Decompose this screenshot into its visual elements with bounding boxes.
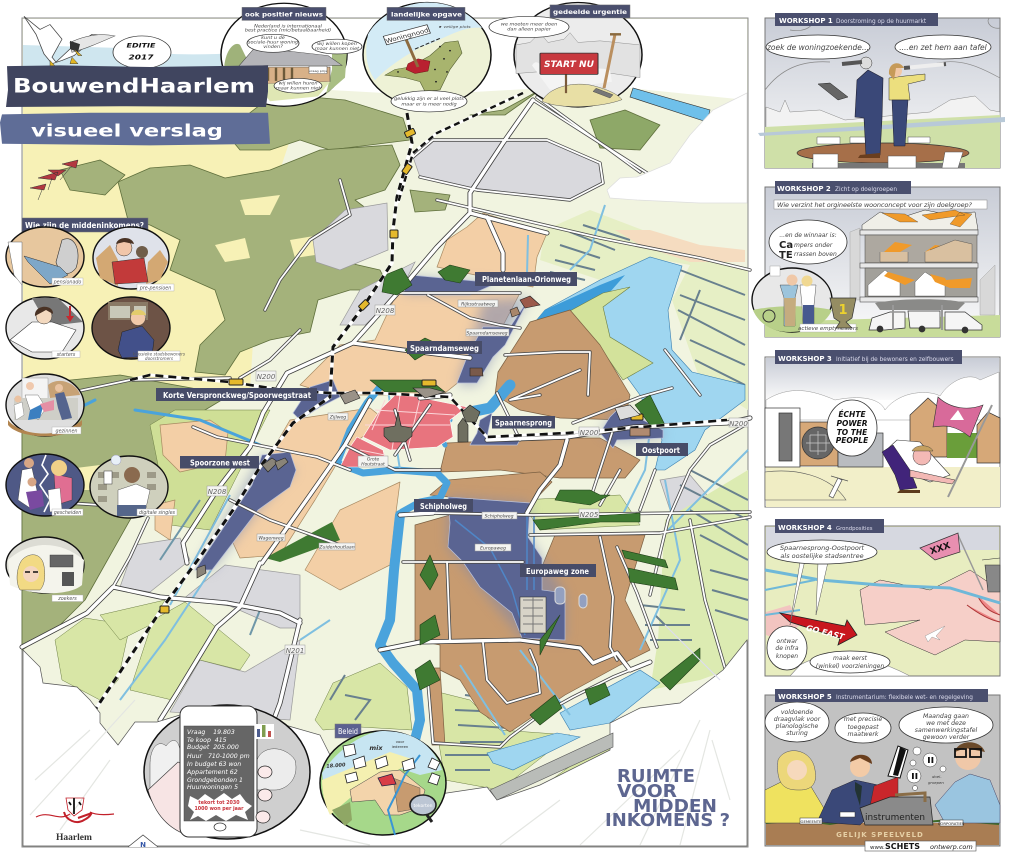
panel: workshop 5: GELIJK SPEELVELD: [836, 831, 924, 839]
speech bubbles: [247, 34, 362, 93]
speech bubble: voldoende draagvlak: [765, 702, 829, 742]
mini bar chart: [256, 724, 274, 739]
logo: schetsontwerp: SCHETS: [885, 842, 920, 851]
road name tags: N201: [286, 647, 304, 655]
dunes yellow: [23, 68, 300, 390]
historic centre red: [340, 393, 467, 467]
circle: Beleid map: tekorten: [414, 803, 433, 809]
speech bubble: zoek de woningzoekende: [766, 35, 870, 59]
speech bubble: ontwar de infra knopen: de infra: [775, 645, 799, 652]
figure: man suit: [817, 755, 880, 825]
road name tags: N200: [257, 373, 276, 381]
speech bubble: echte power: ÉCHTE: [838, 410, 866, 419]
circle: ook positief nieuws: best practice (mic/betaalbaarheid): [245, 28, 331, 33]
speech bubble: maak eerst voorzieningen: [810, 651, 890, 673]
speech bubble: zoek de woningzoekende: zoek de woningzoekende...: [766, 43, 869, 52]
label: Planetenlaan-Orionweg: [475, 272, 577, 286]
circle: pensionado: pensionado: [53, 280, 81, 286]
tab: workshop 2: WORKSHOP 2: [777, 185, 831, 193]
zone: Spaarnesprong: [470, 413, 520, 445]
speech bubbles: wij willen huren: [278, 81, 318, 86]
title: BouwendHaarlem: BouwendHaarlem: [13, 75, 255, 98]
label: Spaarndamseweg: Spaarndamseweg: [410, 344, 479, 353]
tower: [982, 558, 1000, 592]
flag XXX: XXX: [929, 541, 952, 557]
thin canals: [120, 205, 748, 735]
panel: workshop 1: [758, 13, 1005, 168]
sign woningnood: Woningnood: [385, 27, 430, 45]
speech bubble: maandag gaan we: gewoon verder: [923, 734, 970, 741]
circle: zoekers: zoekers: [57, 596, 77, 602]
panel: workshop 2: [752, 181, 1000, 337]
name cards: CORPORATIES: [938, 821, 965, 826]
speech bubble: maak eerst voorzieningen: maak eerst: [833, 655, 868, 662]
doelgroepen icons: [907, 747, 946, 790]
tab: workshop 3: WORKSHOP 3: [778, 355, 832, 363]
rail lines: [93, 93, 727, 713]
speech bubble: voldoende draagvlak: sturing: [786, 729, 808, 737]
circle: landelijke opgave: [363, 2, 491, 112]
circle: ook positief nieuws: vraag prijs: [309, 69, 327, 73]
logo: schetsontwerp: ontwerp.com: [930, 843, 973, 851]
speech bubbles: maar kunnen niet: [276, 86, 320, 91]
Haarlem logo: Haarlem: [56, 833, 92, 843]
road name tags: Schipholweg: [484, 514, 514, 520]
speech bubbles: sociale-huur woning: [248, 40, 298, 45]
label: Beleid: Beleid: [338, 727, 358, 736]
speech bubble: de winnaar: Ca: [779, 240, 793, 251]
sky and coast: [23, 19, 747, 100]
panel: workshop 5: doel-: [932, 774, 942, 779]
logo: schetsontwerp: [865, 841, 976, 851]
dark tan areas: [415, 310, 650, 745]
trophy: 1: [838, 303, 848, 318]
title: BouwendHaarlem: [6, 65, 268, 107]
label: landelijke opgave: [387, 7, 465, 20]
road name tags: N208: [376, 307, 395, 315]
road name tags: Rijksstraatweg: [461, 302, 495, 308]
road name tags: Zuiderhoutlaan: [318, 544, 355, 550]
tab: workshop 2: [775, 181, 911, 194]
circle: pre-pensioen: pre-pensioen: [139, 286, 171, 292]
label: Wie zijn de middeninkomens: Wie zijn de middeninkomens?: [25, 221, 144, 230]
sign start nu: START NU: [544, 60, 594, 70]
circle: landelijke opgave: gelukkig zijn er al veel plots: [394, 97, 465, 102]
tab: workshop 3: [775, 350, 962, 364]
hospital complex: [520, 587, 587, 633]
circle: gedeelde urgentie: we moeten meer doen: [501, 22, 557, 28]
speech bubble: ontwar de infra knopen: knopen: [776, 653, 798, 660]
phone text: Huurwoningen 5: [187, 784, 238, 791]
label: Oostpoort: Oostpoort: [642, 446, 680, 455]
label: gedeelde urgentie: gedeelde urgentie: [553, 8, 627, 16]
circle: Beleid map: iedereen: [392, 744, 409, 749]
zone: Schipholweg and Europaweg: [448, 497, 565, 640]
label: Spaarndamseweg: [407, 341, 482, 354]
speech bubble: met precisie: maatwerk: [847, 730, 879, 738]
north arrow: [128, 835, 158, 849]
circle: landelijke opgave: • veilige plots: [439, 24, 472, 29]
phone text: Vraag 19.803: [187, 729, 235, 736]
north arrow: N: [140, 841, 146, 849]
speech bubble: echte power: POWER: [836, 419, 868, 428]
speech bubbles: wij willen kopen: [317, 41, 357, 47]
table: [797, 137, 969, 168]
phone text: Te koop 415: [187, 737, 227, 744]
question box: Wie verzint het orgineelste woonconcept voor zijn doelgroep?: [777, 201, 973, 209]
speech bubble: de winnaar: [769, 220, 847, 264]
pale street lines in cloud: [30, 625, 730, 845]
seagull illustration: [24, 16, 115, 68]
finger icons: [256, 766, 272, 823]
phone text: Budget 205.000: [187, 743, 239, 751]
figure: woman with telescope: [889, 63, 946, 146]
tab: workshop 4: [775, 519, 884, 533]
mound and spade: [765, 471, 848, 500]
panel: workshop 4: [765, 519, 1000, 676]
label: Korte Verspronckweg/Spoorwegstraat: Korte Verspronckweg/Spoorwegstraat: [163, 391, 311, 400]
speech bubble: de winnaar: rrassen boven: [794, 251, 837, 258]
label: Beleid: [335, 724, 361, 738]
figure: bending builder: [882, 440, 955, 493]
mushroom markers: [30, 160, 78, 200]
label: landelijke opgave: landelijke opgave: [391, 10, 462, 18]
road name tags: Grote: [367, 456, 379, 462]
circle: digitale singles: digitale singles: [139, 510, 176, 516]
circle: gedeelde urgentie: [489, 2, 642, 107]
circle: landelijke opgave: maar er is meer nodig: [401, 102, 457, 107]
zone: Oostpoort: [600, 410, 663, 448]
station icons: [160, 128, 643, 613]
label: gedeelde urgentie: [550, 5, 630, 18]
road name tags: Europaweg: [480, 546, 506, 552]
tab: workshop 4: WORKSHOP 4: [778, 524, 832, 532]
heading: ruimte voor middeninkomens: [605, 766, 730, 831]
grey road band bottom right: [490, 733, 613, 800]
circle: actieve empty nesters: [752, 266, 832, 332]
subtitle: visueel verslag: [0, 113, 270, 145]
urban regeneration zones: [195, 275, 663, 640]
roads: [22, 100, 750, 735]
flag: [933, 397, 992, 497]
circle: pre-pensioen: [93, 227, 174, 292]
name cards: [800, 812, 965, 826]
heading: ruimte voor middeninkomens: MIDDEN: [633, 796, 717, 817]
road name tags: N205: [580, 511, 599, 519]
speech bubble: de winnaar: ...en de winnaar is:: [779, 232, 837, 239]
light green fields: [55, 280, 640, 792]
green block west: [265, 522, 340, 562]
toolbox instrumenten: instrumenten: [865, 813, 925, 823]
figure: man glasses: [935, 742, 1000, 823]
phone text: Grondgebonden 1: [187, 777, 243, 784]
label: Spoorzone west: [180, 456, 259, 468]
speech bubble: en zet hem aan tafel: ....en zet hem aan tafel: [899, 43, 988, 52]
speech bubble: met precisie: [835, 713, 891, 743]
circle: gescheiden: gescheiden: [54, 510, 81, 516]
panel: workshop 5: [765, 689, 1000, 851]
dark green tree lines: [370, 265, 700, 725]
polder peninsula: [568, 287, 653, 380]
road name tags: Spaarndamseweg: [466, 330, 508, 336]
tab: workshop 2: Zicht op doelgroepen: [835, 187, 897, 193]
phone text: [186, 729, 250, 791]
label: Schipholweg: Schipholweg: [420, 502, 467, 511]
buildings: cathedral and landmarks: [197, 296, 650, 578]
zone: Spaarndamseweg: [457, 297, 530, 383]
phone text: Huur 710-1000 pm: [187, 753, 250, 760]
speech bubble: de winnaar: TE: [779, 250, 793, 261]
name cards: GEMEENTE: [801, 819, 822, 824]
dark blue water: [505, 275, 625, 400]
circle: gedeelde urgentie: dan alleen papier: [507, 27, 552, 32]
yellow clearings in forest: [60, 195, 320, 490]
road name tags: N200: [729, 420, 748, 428]
map panel: [22, 18, 750, 847]
clouds and white margins: [23, 93, 747, 846]
tab: workshop 1: [775, 13, 938, 26]
zone: Planetenlaan-Orionweg: [403, 275, 497, 295]
circle: klassieke stadsbewoners: doorstromers: [145, 356, 174, 361]
speech bubble: maak eerst voorzieningen: (winkel) voorzieningen: [816, 663, 884, 670]
circle: klassieke stadsbewoners: [92, 297, 186, 361]
speech bubble: echte power: PEOPLE: [836, 436, 869, 445]
circle: starters: starters: [57, 352, 76, 358]
circle: Beleid map: voor: [396, 739, 405, 744]
label: Spoorzone west: Spoorzone west: [190, 458, 250, 468]
tab: workshop 3: Initiatief bij de bewoners en zelfbouwers: [836, 357, 954, 363]
speech bubble: met precisie: met precisie: [844, 715, 882, 723]
toolbox instrumenten: [860, 793, 933, 825]
apartment building: [860, 210, 978, 310]
speech bubble: ontwar de infra knopen: ontwar: [777, 638, 798, 645]
circle: gezinnen: gezinnen: [56, 428, 77, 434]
circle: Beleid map: [320, 731, 446, 835]
circle: Beleid map: 18.000: [326, 762, 346, 770]
caption: actieve emptynesters: actieve emptynesters: [798, 326, 858, 332]
label: Korte Verspronckweg/Spoorwegstraat: [156, 388, 317, 401]
Haarlem logo: [36, 798, 114, 843]
label: ook positief nieuws: [242, 7, 326, 20]
tab: workshop 4: Grondposities: [836, 526, 873, 532]
label: Spaarnesprong: Spaarnesprong: [495, 418, 552, 428]
tan housing areas: [155, 213, 745, 590]
circle: gescheiden: [6, 454, 84, 516]
arrow: go east: GO EAST: [805, 623, 846, 642]
circle: ook positief nieuws: [221, 3, 362, 106]
circle: phone figures: [144, 705, 310, 839]
figure: woman: [765, 751, 830, 823]
label: Wie zijn de middeninkomens: [22, 218, 148, 232]
figure: man with telescope: [818, 57, 883, 158]
sign start nu: [540, 53, 598, 74]
smartphone: [180, 706, 257, 837]
speech bubble: Spaarnesprong-Oostpoort: [767, 540, 877, 625]
circle: gezinnen: [6, 374, 84, 436]
circle: digitale singles: [90, 455, 177, 518]
road name tags: Zijlweg: [329, 414, 346, 420]
heading: ruimte voor middeninkomens: VOOR: [617, 781, 677, 802]
speech bubble: met precisie: toegepast: [847, 723, 879, 731]
road name tags: N200: [580, 429, 599, 437]
big water: [487, 257, 745, 770]
tab: workshop 5: WORKSHOP 5: [778, 693, 832, 701]
panel: workshop 5: groepen: [928, 780, 944, 785]
label: Europaweg zone: [520, 564, 596, 577]
plane: [925, 626, 945, 642]
speech bubble: maandag gaan we: [899, 707, 993, 743]
campers: [869, 305, 982, 333]
speech bubbles: vinden?: [263, 45, 283, 50]
edition bubble: [113, 36, 171, 69]
edition bubble: 2017: [128, 52, 154, 61]
edition bubble: EDITIE: [127, 41, 155, 49]
burst: tekort tot 2030: [198, 800, 240, 806]
subtitle: visueel verslag: visueel verslag: [31, 120, 223, 141]
road name tags: Wagenweg: [258, 536, 284, 542]
speech bubble: en zet hem aan tafel: [895, 35, 991, 59]
label: ook positief nieuws: ook positief nieuws: [245, 10, 323, 18]
panel: workshop 3: [765, 350, 1000, 507]
tab: workshop 5: [775, 689, 988, 702]
buildings: [765, 398, 1000, 467]
flag XXX: [920, 533, 983, 590]
label: Schipholweg: [414, 499, 473, 512]
circle: ook positief nieuws: Nederland is internationaal: [254, 24, 323, 29]
speech bubble: echte power: TO THE: [837, 428, 868, 437]
tab: workshop 5: Instrumentarium: flexibele wet- en regelgeving: [836, 695, 973, 701]
heading: ruimte voor middeninkomens: RUIMTE: [617, 766, 695, 787]
polder right: [650, 470, 748, 690]
circle: Beleid map: mix: [369, 744, 383, 752]
label: Spaarnesprong: [492, 416, 555, 428]
arrow: go east: [780, 613, 857, 645]
speech bubble: Spaarnesprong-Oostpoort: Spaarnesprong-Oostpoort: [780, 544, 864, 552]
polder ditches: [330, 225, 748, 770]
forest areas: [22, 90, 660, 650]
speech bubble: voldoende draagvlak: draagvlak voor: [774, 716, 821, 723]
road name tags: [207, 300, 748, 655]
tab: workshop 1: WORKSHOP 1: [779, 17, 833, 25]
logo: schetsontwerp: www.: [870, 845, 885, 851]
label: Oostpoort: [636, 443, 688, 456]
speech bubble: echte power: [827, 400, 877, 456]
circle: klassieke stadsbewoners: klassieke stadsbewoners: [133, 352, 186, 356]
grey urban areas: [120, 140, 745, 720]
speech bubble: maandag gaan we: Maandag gaan: [923, 713, 969, 720]
trophy: [830, 298, 856, 328]
circle: zoekers: [6, 537, 84, 602]
burst: 1000 won per jaar: [194, 806, 244, 812]
zone: Spoorzone west: [195, 452, 296, 570]
speech bubble: voldoende draagvlak: planologische: [775, 723, 819, 730]
rivers: [55, 385, 510, 740]
speech bubble: voldoende draagvlak: voldoende: [781, 709, 813, 716]
speech bubble: de winnaar: mpers onder: [794, 242, 833, 249]
road name tags: Houtstraat: [361, 462, 385, 468]
map labels: [156, 272, 688, 577]
speech bubble: maandag gaan we: we met deze: [926, 719, 966, 727]
label: Europaweg zone: Europaweg zone: [526, 567, 589, 576]
zone canals: [455, 515, 534, 635]
binder and red book: [870, 746, 908, 806]
speech bubble: maandag gaan we: samenwerkingstafel: [915, 726, 978, 734]
speech bubbles: kunt u de: [261, 36, 285, 41]
circle: pensionado: [6, 227, 84, 287]
circle: starters: [6, 297, 84, 359]
burst: [188, 793, 252, 821]
zone: Korte Verspronckweg: [293, 380, 340, 420]
heading: ruimte voor middeninkomens: INKOMENS ?: [605, 810, 730, 831]
road name tags: N208: [208, 488, 227, 496]
pink land: [860, 570, 1000, 655]
tab: workshop 1: Doorstroming op de huurmarkt: [836, 19, 927, 25]
phone text: In budget 63 won: [187, 760, 241, 768]
speech bubble: ontwar de infra knopen: [767, 626, 807, 670]
canal: [765, 570, 1000, 603]
phone text: Appartement 62: [186, 768, 238, 776]
speech bubble: Spaarnesprong-Oostpoort: als oostelijke stadsentree: [780, 552, 864, 560]
label: Planetenlaan-Orionweg: Planetenlaan-Orionweg: [482, 275, 571, 284]
speech bubbles: maar kunnen niet: [315, 46, 359, 52]
